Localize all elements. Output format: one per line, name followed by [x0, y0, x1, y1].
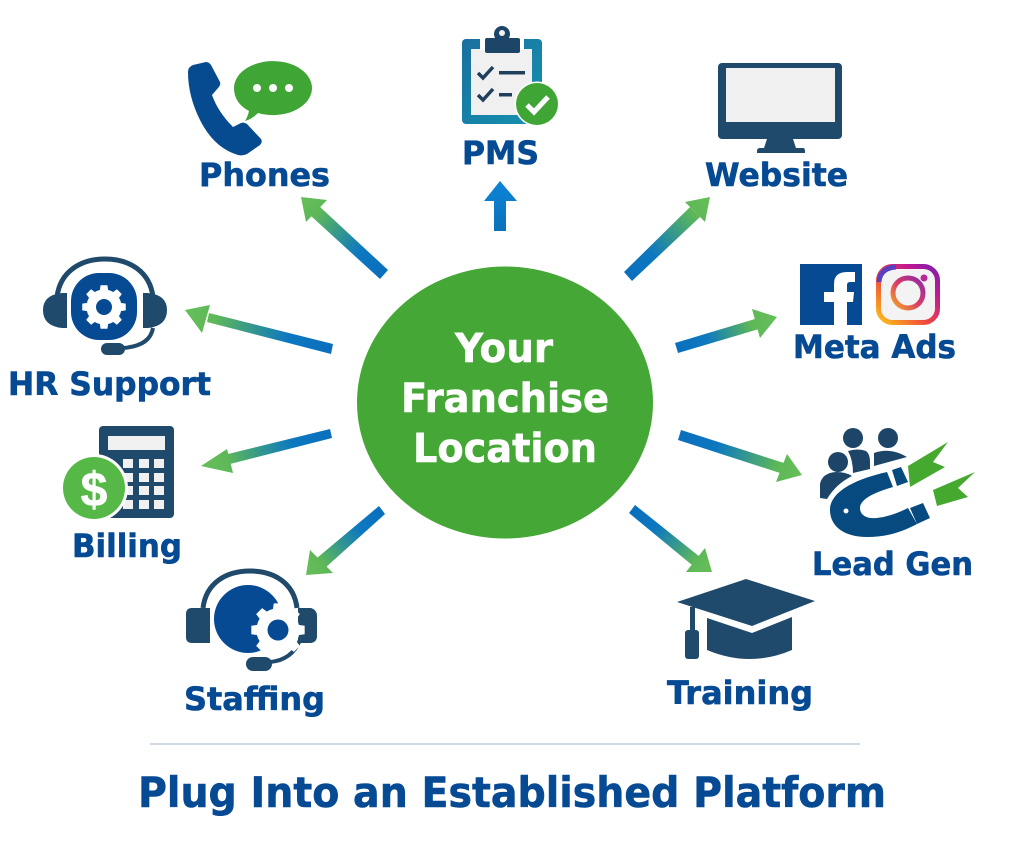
label: Billing: Billing [72, 527, 182, 565]
arrow: to Lead Gen [678, 430, 802, 482]
arrow: to Phones [301, 197, 388, 279]
icon: phone with chat bubble [188, 61, 312, 155]
label: Staffing: Staffing [184, 680, 325, 718]
center circle: Your Franchise Location [357, 266, 653, 538]
arrow: to Staffing [306, 506, 385, 575]
icon: staffing headset with gear [186, 571, 317, 671]
label: PMS: PMS [462, 134, 539, 172]
icon: people and magnet with lightning [820, 428, 975, 537]
icon: calculator with dollar coin [60, 426, 174, 522]
icon: HR headset with gear [43, 259, 167, 355]
label: Meta Ads: Meta Ads [793, 328, 956, 366]
icon: graduation cap [677, 579, 815, 659]
center circle: Your Franchise Location: Location [413, 426, 597, 472]
label: Website: Website [705, 156, 848, 194]
icon: clipboard checklist [462, 26, 560, 126]
arrow: to Meta Ads [675, 309, 777, 353]
label: Training: Training [667, 674, 813, 712]
center circle: Your Franchise Location: Your [454, 326, 553, 372]
arrow: to PMS [484, 181, 517, 231]
label: Lead Gen: Lead Gen [812, 545, 973, 583]
title: Plug Into an Established Platform: Plug Into an Established Platform [138, 768, 886, 817]
icon: desktop monitor [718, 63, 842, 153]
arrow: to HR Support [185, 305, 333, 354]
arrow: to Billing [201, 429, 332, 473]
label: HR Support: HR Support [8, 365, 211, 403]
arrow: to Website [624, 197, 710, 281]
arrow: to Training [629, 505, 712, 572]
label: Phones: Phones [199, 156, 330, 194]
icon: Instagram logo [878, 266, 938, 322]
icon: calculator with dollar coin: $ [81, 464, 108, 517]
icon: Facebook logo [800, 264, 862, 325]
center circle: Your Franchise Location: Franchise [401, 376, 609, 422]
